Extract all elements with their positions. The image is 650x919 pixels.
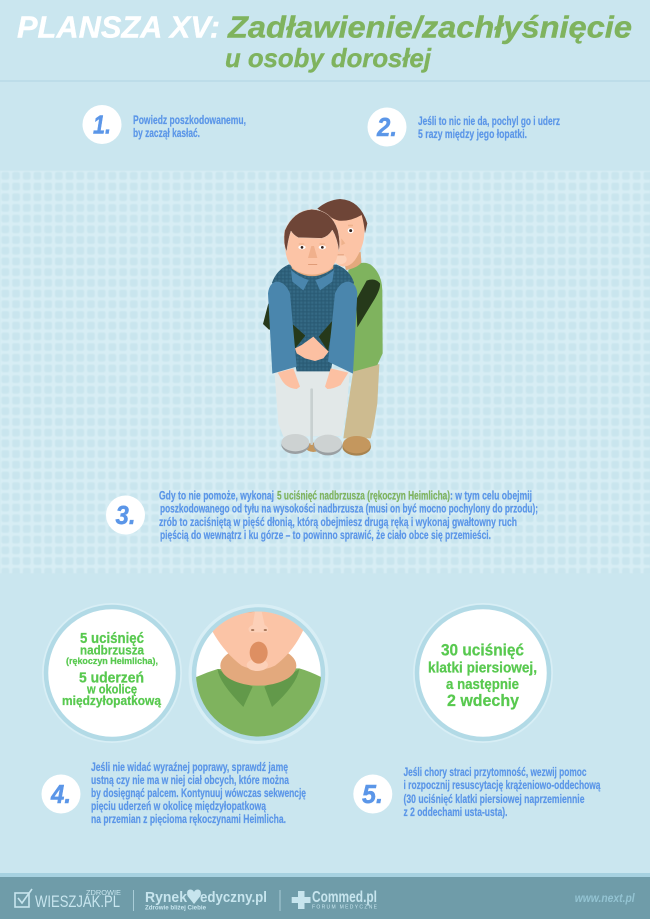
victim face: [285, 212, 339, 275]
rescuer neck: [343, 252, 361, 270]
step 2: 2.: [376, 112, 397, 142]
circle: CPR ratio: klatki piersiowej,: [428, 660, 537, 677]
step 5: z 2 oddechami usta-usta).: [404, 805, 508, 819]
rescuer eye: [348, 225, 354, 233]
logo: Zdrowie WieszJak.pl: ZDROWIE: [86, 890, 121, 897]
step 5: [353, 765, 601, 819]
website address: www.next.pl: [575, 893, 635, 905]
circle: compressions and back blows: w okolicę: [86, 682, 137, 696]
clasped hands: [295, 337, 329, 361]
rescuer forearms: [292, 319, 334, 351]
circle: CPR ratio: 30 uciśnięć: [441, 641, 524, 660]
victim trousers: [274, 368, 350, 437]
circle: compressions and back blows: międzyłopatkową: [62, 693, 162, 708]
circle: CPR ratio: [413, 603, 553, 743]
portrait eyes: [247, 612, 254, 613]
rescuer hair: [317, 199, 367, 233]
patterned band: [0, 170, 650, 574]
victim shoes: [281, 434, 342, 455]
victim collar: [291, 270, 334, 290]
rescuer arm left: [263, 303, 273, 330]
victim trousers crease: [310, 388, 313, 445]
rescuer chin highlight: [333, 254, 347, 264]
logo: Commed.pl: Commed.pl: [312, 889, 377, 906]
step 4: pięciu uderzeń w okolicę międzyłopatkową: [91, 799, 266, 813]
logo: RynekMedyczny.pl: edyczny.pl: [200, 889, 267, 906]
illustration: rescuer performing the Heimlich manoeuvre: [263, 199, 383, 456]
step 1: by zaczął kasłać.: [133, 126, 200, 140]
logo: RynekMedyczny.pl: Zdrowie bliżej Ciebie: [145, 906, 207, 912]
step 3: 5 uciśnięć nadbrzusza (rękoczyn Heimlicha): [277, 488, 450, 502]
rescuer face: [327, 213, 365, 267]
victim neck: [292, 264, 333, 276]
step 4: [42, 760, 306, 826]
portrait shirt: [196, 668, 321, 736]
step 1: 1.: [93, 110, 111, 140]
victim arm right: [328, 282, 357, 374]
victim hair: [284, 209, 340, 252]
title: Zadławienie/zachłyśnięcie: [227, 10, 632, 44]
step 1: [82, 105, 246, 144]
circle: compressions and back blows: 5 uciśnięć: [80, 630, 144, 647]
rescuer trousers: [343, 364, 379, 438]
portrait nose: [248, 612, 268, 632]
logo: Zdrowie WieszJak.pl: [15, 889, 121, 911]
logo: Commed.pl: FORUM MEDYCZNE: [312, 905, 378, 911]
step 4: ustną czy nie ma w niej ciał obcych, które można: [91, 773, 289, 787]
step 2: [368, 108, 560, 146]
victim arm left: [268, 282, 297, 374]
circle: compressions and back blows: 5 uderzeń: [79, 670, 144, 687]
circle: CPR ratio: a następnie: [446, 676, 519, 693]
circle: compressions and back blows: (rękoczyn Heimlicha),: [66, 656, 158, 666]
portrait neck: [220, 653, 296, 686]
step 3: 3.: [116, 500, 136, 530]
rescuer arm right: [356, 279, 380, 327]
step 5: (30 uciśnięć klatki piersiowej naprzemiennie: [404, 792, 585, 806]
step 2: Jeśli to nic nie da, pochyl go i uderz: [418, 114, 560, 128]
portrait chin highlight: [247, 659, 268, 671]
step 1: Powiedz poszkodowanemu,: [133, 113, 246, 127]
rescuer shoes: [306, 436, 371, 456]
step 3: Gdy to nie pomoże, wykonaj: [159, 488, 274, 502]
logo: RynekMedyczny.pl: Rynek: [145, 889, 188, 906]
rescuer shirt: [347, 263, 383, 372]
victim hand left: [278, 368, 300, 389]
portrait collar: [218, 669, 299, 707]
step 3: pięścią do wewnątrz i ku górze – to powinno sprawić, że ciało obce się przemieści.: [160, 528, 491, 542]
logo: Zdrowie WieszJak.pl: WIESZJAK.PL: [35, 892, 120, 911]
circle: compressions and back blows: nadbrzusza: [80, 642, 145, 658]
portrait face: [212, 612, 304, 669]
footer: [0, 873, 650, 919]
circle portrait: choking face: [188, 604, 328, 748]
logo: RynekMedyczny.pl: [145, 889, 267, 912]
logo: Commed.pl: [292, 889, 378, 911]
step 4: by dosięgnąć palcem. Kontynuuj wówczas sekwencję: [91, 786, 306, 800]
step 5: 5.: [362, 779, 383, 809]
portrait open mouth: [250, 642, 268, 664]
circle: compressions and back blows: [42, 603, 182, 743]
step 4: Jeśli nie widać wyraźnej poprawy, sprawdź jamę: [91, 760, 288, 774]
step 4: 4.: [50, 779, 71, 809]
title: u osoby dorosłej: [225, 43, 432, 73]
title: PLANSZA XV:: [17, 10, 220, 44]
circle: CPR ratio: 2 wdechy: [447, 691, 520, 710]
victim hand right: [325, 368, 348, 389]
victim eyes: [298, 243, 326, 249]
step 3: [106, 488, 538, 542]
portrait nostrils: [251, 629, 267, 631]
rescuer nose and mouth: [337, 238, 345, 255]
victim nose and mouth: [308, 246, 317, 265]
title: [17, 10, 632, 73]
step 2: 5 razy między jego łopatki.: [418, 127, 527, 141]
step 3: : w tym celu obejmij: [450, 488, 532, 502]
victim vest: [272, 265, 354, 371]
step 3: zrób to zaciśniętą w pięść dłonią, którą obejmiesz drugą ręką i wykonaj gwałtowny ruch: [159, 515, 517, 529]
step 4: na przemian z pięcioma rękoczynami Heimlicha.: [91, 812, 286, 826]
